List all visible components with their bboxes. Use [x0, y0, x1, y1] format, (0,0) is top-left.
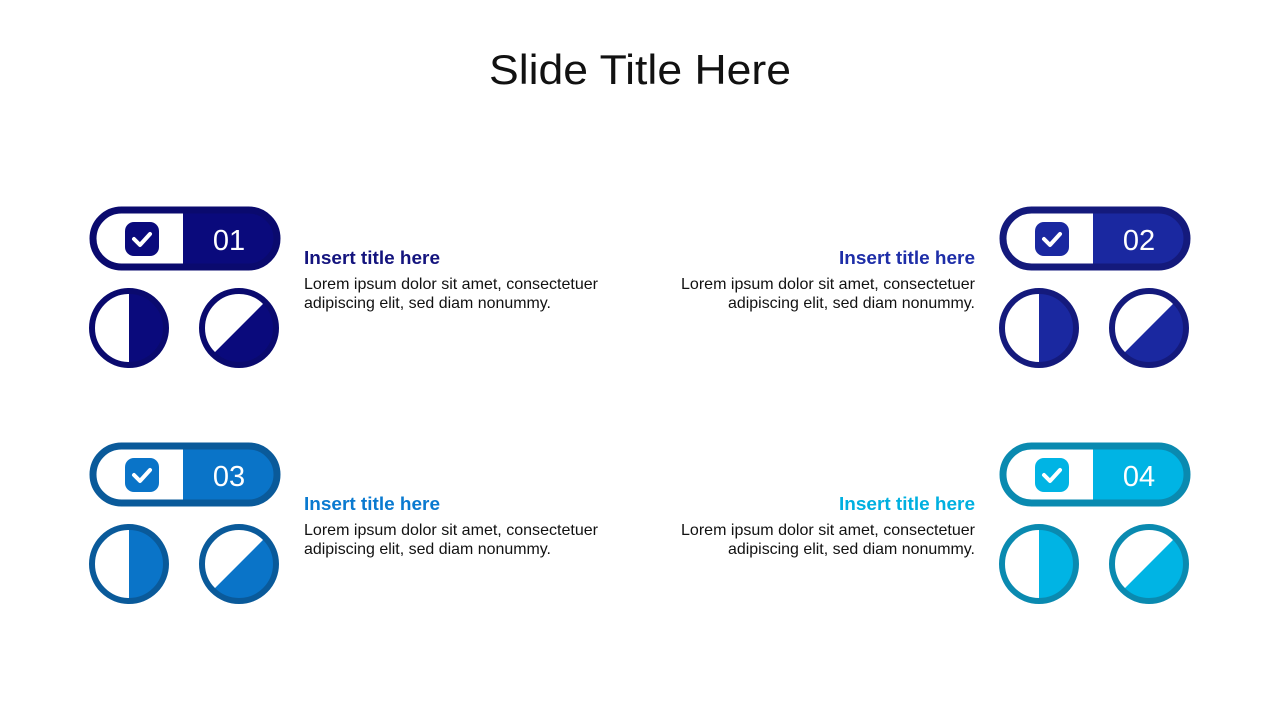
text block 03: [304, 494, 599, 558]
text block 02: Lorem ipsum dolor sit amet, consectetuer: [681, 276, 976, 293]
text block 01: [304, 248, 599, 312]
text block 01: Lorem ipsum dolor sit amet, consectetuer: [304, 276, 599, 293]
text block 02: Insert title here: [839, 248, 975, 268]
panel: item 03: [92, 446, 277, 601]
pill toggle 04: 04: [1123, 461, 1155, 493]
text block 04: [681, 494, 976, 558]
text block 03: Insert title here: [304, 494, 440, 514]
diagonal circle icon 02: [1112, 291, 1186, 365]
text block 04: adipiscing elit, sed diam nonummy.: [728, 541, 975, 558]
text block 02: adipiscing elit, sed diam nonummy.: [728, 295, 975, 312]
half circle icon 02: [1002, 291, 1076, 365]
pill toggle 02: [1003, 210, 1187, 267]
text block 03: adipiscing elit, sed diam nonummy.: [304, 541, 551, 558]
half circle icon 03: [92, 527, 166, 601]
panel: item 02: [1002, 210, 1187, 365]
title: Slide Title Here: [489, 46, 791, 93]
text block 01: Insert title here: [304, 248, 440, 268]
pill toggle 02: 02: [1123, 225, 1155, 257]
pill toggle 04: [1003, 446, 1187, 503]
half circle icon 04: [1002, 527, 1076, 601]
text block 01: adipiscing elit, sed diam nonummy.: [304, 295, 551, 312]
diagonal circle icon 03: [202, 527, 276, 601]
diagonal circle icon 01: [202, 291, 276, 365]
panel: item 04: [1002, 446, 1187, 601]
panel: item 01: [92, 210, 277, 365]
pill toggle 03: 03: [213, 461, 245, 493]
diagonal circle icon 04: [1112, 527, 1186, 601]
text block 04: Lorem ipsum dolor sit amet, consectetuer: [681, 522, 976, 539]
text block 04: Insert title here: [839, 494, 975, 514]
text block 02: [681, 248, 976, 312]
text block 03: Lorem ipsum dolor sit amet, consectetuer: [304, 522, 599, 539]
pill toggle 01: [93, 210, 277, 267]
half circle icon 01: [92, 291, 166, 365]
pill toggle 01: 01: [213, 225, 245, 257]
pill toggle 03: [93, 446, 277, 503]
